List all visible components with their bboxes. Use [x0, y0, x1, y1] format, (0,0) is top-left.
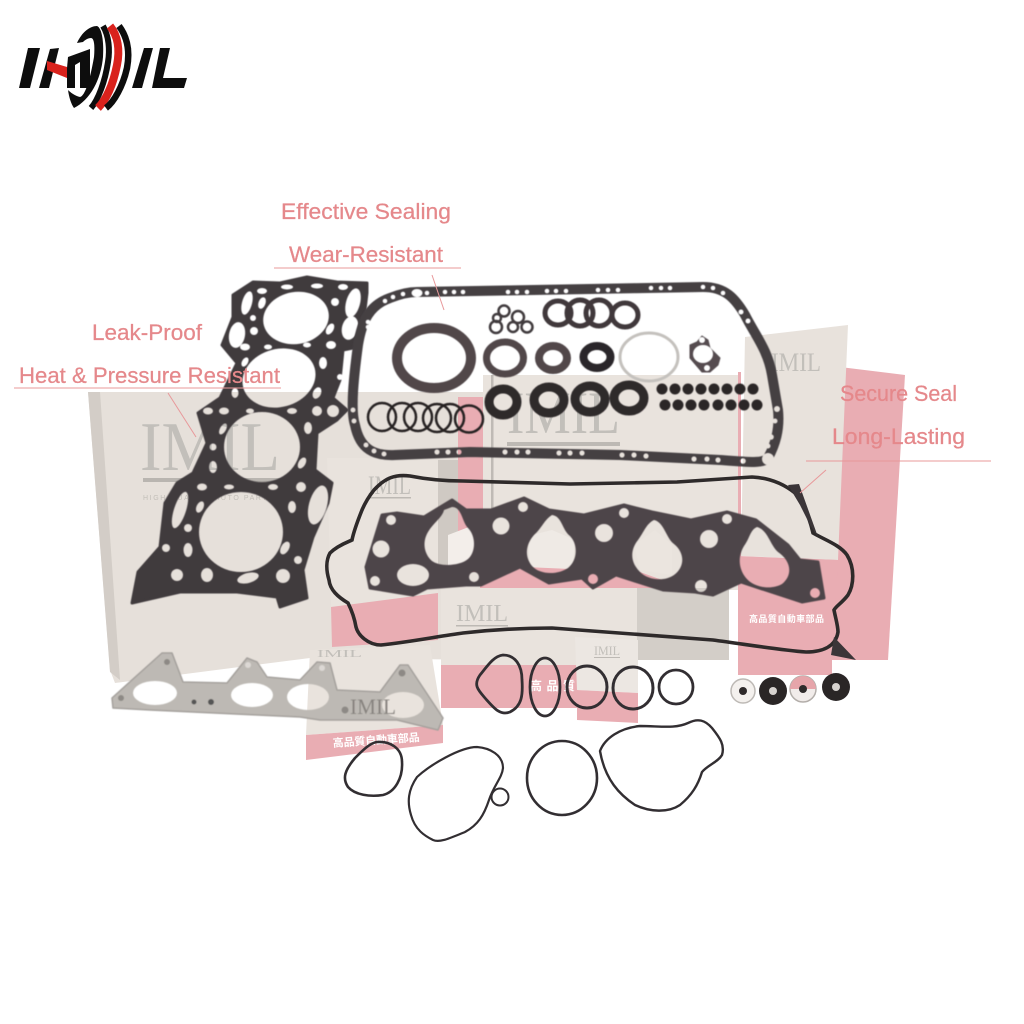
gasket: valve cover ring	[327, 476, 856, 660]
lower left box face	[306, 645, 443, 735]
oval ring	[530, 658, 560, 716]
white washer	[731, 679, 755, 703]
right box pink band	[738, 556, 838, 675]
tiny centre box logo: IMIL	[594, 643, 620, 658]
black washer two	[822, 673, 850, 701]
right pink box panel	[800, 367, 905, 660]
callout: secure seal and long lasting: Long-Lasting	[832, 424, 965, 449]
small black washers rows	[656, 384, 762, 410]
large round ring	[527, 741, 597, 815]
lower left box pink band	[306, 725, 443, 760]
gasket: cylinder head	[132, 277, 367, 607]
large crankshaft seal	[397, 328, 471, 388]
tiny centre box face	[575, 637, 638, 693]
large box face	[88, 392, 500, 683]
lower left box logo: IMIL	[317, 649, 362, 660]
centre box face	[483, 375, 738, 590]
small o-rings cluster	[490, 306, 532, 333]
callout: secure seal and long lasting	[800, 381, 991, 493]
large box side strip	[88, 392, 120, 680]
gasket: exhaust manifold	[112, 653, 443, 730]
small left box logo: IMIL	[368, 471, 411, 500]
small left box face	[327, 458, 438, 607]
valve cover top tab	[788, 484, 818, 537]
o-rings and washers lower set	[345, 655, 723, 841]
right box logo: IMIL	[771, 348, 821, 377]
large box logo: IMIL	[140, 409, 280, 486]
product fragments seen through ports	[448, 525, 476, 570]
valve cover bottom tab	[831, 637, 856, 660]
tiny centre box pink band	[577, 690, 638, 723]
logo letter L	[152, 48, 187, 88]
top ring set	[545, 300, 638, 327]
product boxes backdrop	[88, 325, 905, 760]
large box tagline: HIGH QUALITY AUTO PARTS	[143, 495, 273, 502]
logo numeral one	[67, 49, 90, 88]
right box Japanese label: 高品質自動車部品	[749, 613, 824, 624]
callout: effective sealing and wear resistant	[274, 199, 461, 310]
right beige box	[741, 325, 848, 560]
clear ring	[620, 333, 678, 381]
centre box edge stripe	[491, 375, 494, 515]
small left box grey side	[438, 460, 458, 572]
callout: effective sealing and wear resistant: Wear-Resistant	[289, 242, 443, 267]
logo tyre stripes	[91, 26, 109, 108]
callout: effective sealing and wear resistant: Effective Sealing	[281, 199, 451, 224]
pink box side stripe	[458, 397, 483, 572]
round rings	[567, 666, 607, 708]
product infographic canvas	[14, 24, 991, 842]
o-ring row	[368, 403, 483, 432]
lower left box Japanese label: 高品質自動車部品	[332, 730, 420, 750]
upper seal row	[486, 342, 610, 374]
half pink washer	[790, 676, 816, 702]
gasket: oil pan with seals inside	[353, 287, 778, 462]
lower centre box face	[441, 588, 637, 665]
flange gasket	[690, 336, 720, 372]
lower seal row	[489, 385, 644, 415]
lower centre box Japanese label: 高品質	[530, 678, 575, 693]
centre box logo: IMIL	[507, 380, 620, 446]
logo showing through exhaust gasket: IMIL	[350, 694, 396, 719]
lower left triangle ring	[345, 742, 402, 796]
grey box side	[636, 588, 729, 660]
logo slash	[132, 48, 153, 88]
callout: secure seal and long lasting: Secure Seal	[840, 381, 957, 406]
large blob ring	[600, 720, 723, 811]
logo letter M left stroke	[39, 48, 59, 88]
brand logo	[19, 26, 187, 108]
logo red arrow	[47, 61, 67, 78]
callout: leak proof and heat pressure resistant: Heat & Pressure Resistant	[19, 363, 280, 388]
large box logo rule	[143, 478, 285, 482]
oil pan ring	[353, 287, 778, 462]
rounded triangle ring	[477, 655, 522, 713]
exhaust gasket holes	[118, 659, 406, 714]
callout: leak proof and heat pressure resistant	[14, 320, 281, 437]
callout: leak proof and heat pressure resistant: Leak-Proof	[92, 320, 203, 345]
small left box pink band	[331, 593, 438, 647]
logo letter I	[19, 48, 40, 88]
logo tyre crescent	[68, 26, 103, 108]
lower centre box pink band	[441, 665, 577, 708]
gasket: intake manifold	[366, 498, 824, 602]
grommet washers	[731, 673, 850, 705]
black washer one	[759, 677, 787, 705]
tall oval gasket ring with loop	[409, 747, 503, 841]
lower centre box logo: IMIL	[456, 601, 508, 627]
